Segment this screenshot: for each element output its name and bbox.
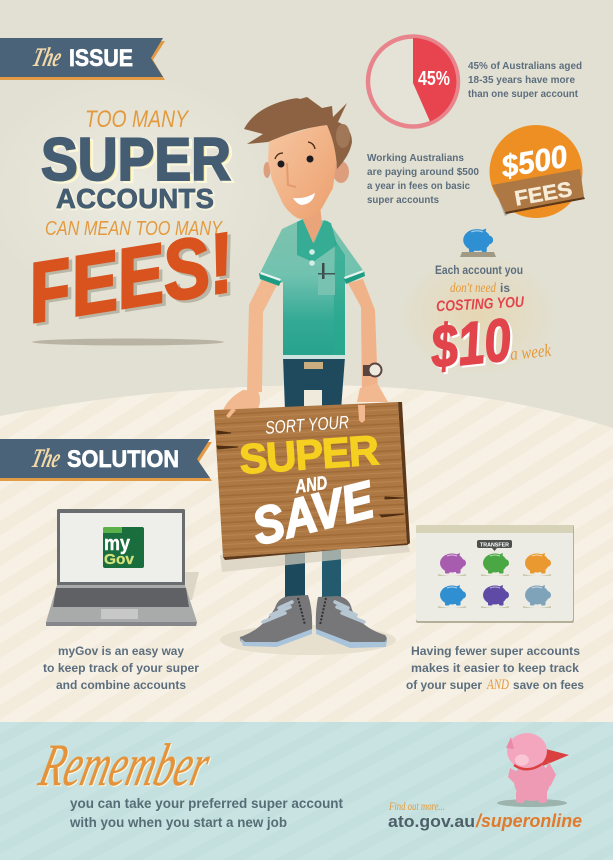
legs bbox=[283, 357, 345, 598]
shoes bbox=[240, 595, 387, 648]
badge: $500 fees bbox=[490, 125, 585, 218]
text: fewer super accounts: save on fees bbox=[513, 678, 584, 692]
text: find out more url: Find out more... bbox=[388, 799, 445, 813]
badge: $500 fees: FEES bbox=[513, 178, 574, 211]
text: fewer super accounts: makes it easier to keep track bbox=[411, 661, 579, 675]
headline: too many super accounts: TOO MANY bbox=[85, 106, 190, 133]
ribbon: the issue: The bbox=[30, 42, 65, 72]
icon: mygov logo: Gov bbox=[104, 551, 135, 568]
headline shadow bbox=[32, 338, 224, 346]
ribbon: the issue: ISSUE bbox=[69, 45, 133, 72]
icon: mygov logo: my bbox=[104, 533, 131, 555]
character: young man bbox=[220, 97, 410, 648]
text: each account costing you $10: $10 bbox=[427, 306, 514, 381]
text: find out more url: /superonline bbox=[475, 811, 582, 831]
text: fewer super accounts: Having fewer super accounts bbox=[411, 644, 580, 658]
hair bbox=[244, 97, 352, 169]
headline: too many super accounts: CAN MEAN TOO MANY bbox=[45, 218, 223, 240]
text: each account costing you $10 bbox=[427, 263, 553, 383]
belt bbox=[282, 355, 345, 369]
right arm bbox=[348, 279, 378, 392]
watch bbox=[363, 362, 382, 378]
icon: mygov logo bbox=[103, 527, 144, 568]
text: remember: Remember bbox=[34, 734, 217, 800]
headline: fees: FEES! bbox=[25, 218, 243, 343]
headline: fees: FEES! bbox=[21, 215, 239, 340]
wooden sign: sort your super and save: SORT YOUR bbox=[264, 412, 350, 438]
text: fewer super accounts: AND bbox=[486, 677, 509, 693]
text: mygov description: and combine accounts bbox=[56, 678, 186, 692]
text: 45% of Australians bbox=[468, 60, 582, 100]
tooltip: transfer: TRANSFER bbox=[480, 542, 509, 548]
text: take your account with you bbox=[69, 796, 343, 830]
ribbon: the solution: SOLUTION bbox=[67, 446, 179, 473]
text: take your account with you: with you when you start a new job bbox=[69, 815, 287, 830]
ribbon: the issue bbox=[0, 38, 165, 80]
text: take your account with you: you can take your preferred super account bbox=[70, 796, 343, 811]
text: find out more url: ato.gov.au bbox=[388, 812, 475, 831]
text: each account costing you $10: a week bbox=[509, 340, 553, 364]
icon: blue piggy bank bbox=[460, 228, 496, 257]
headline: too many super accounts: SUPER bbox=[41, 126, 231, 193]
text: mygov description: to keep track of your super bbox=[43, 661, 199, 675]
text: working australians: a year in fees on basic bbox=[367, 180, 470, 192]
text: remember bbox=[33, 733, 217, 800]
wooden sign: sort your super and save bbox=[214, 402, 410, 560]
headline: too many super accounts: ACCOUNTS bbox=[56, 183, 214, 214]
tooltip: transfer bbox=[477, 540, 512, 551]
text: each account costing you $10: COSTING YOU bbox=[436, 294, 525, 315]
icon: laptop with mygov bbox=[46, 509, 199, 626]
pie chart: 45% bbox=[368, 36, 458, 126]
glow behind costing text bbox=[398, 253, 558, 377]
text: mygov description bbox=[43, 644, 199, 692]
face bbox=[268, 123, 337, 219]
text: each account costing you $10: $10 bbox=[429, 308, 516, 383]
neck bbox=[303, 205, 322, 243]
wooden sign: sort your super and save: AND bbox=[293, 473, 329, 498]
panel: piggy bank account window bbox=[416, 525, 574, 623]
hands bbox=[222, 383, 388, 414]
text: 45% of Australians: 18-35 years have more bbox=[468, 74, 575, 86]
text: working australians: super accounts bbox=[367, 194, 439, 206]
badge: $500 fees: $500 bbox=[498, 139, 570, 185]
floor shadow bbox=[220, 625, 396, 655]
headline: too many super accounts: ACCOUNTS bbox=[57, 184, 215, 215]
text: working australians bbox=[367, 152, 479, 206]
text: 45% of Australians: 45% of Australians aged bbox=[468, 60, 582, 72]
facial features bbox=[275, 142, 315, 205]
text: each account costing you $10: is bbox=[500, 281, 510, 295]
ears bbox=[264, 161, 349, 183]
wooden sign: sort your super and save: SAVE bbox=[247, 471, 380, 557]
text: working australians: are paying around $500 bbox=[367, 166, 479, 178]
icon: superhero pig bbox=[497, 733, 569, 807]
text: each account costing you $10: don't need bbox=[450, 281, 497, 296]
finger over sign bbox=[226, 405, 365, 422]
text: remember: Remember bbox=[33, 733, 216, 799]
text: fewer super accounts: of your super bbox=[406, 678, 482, 692]
ribbon: the solution bbox=[0, 439, 212, 481]
left arm bbox=[247, 279, 277, 392]
pie chart: 45%: 45% bbox=[418, 68, 450, 90]
sign shadow bbox=[220, 545, 410, 572]
text: find out more url bbox=[388, 799, 582, 831]
text: 45% of Australians: than one super account bbox=[468, 88, 578, 100]
text: each account costing you $10: Each account you bbox=[435, 263, 523, 277]
text: mygov description: myGov is an easy way bbox=[58, 644, 184, 658]
piggy banks bbox=[438, 553, 551, 608]
text: working australians: Working Australians bbox=[367, 152, 464, 164]
ribbon: the solution: The bbox=[29, 443, 64, 473]
headline: too many super accounts: SUPER bbox=[44, 128, 234, 195]
headline: too many super accounts bbox=[41, 106, 234, 240]
text: fewer super accounts bbox=[406, 644, 584, 693]
wooden sign: sort your super and save: SUPER bbox=[238, 426, 381, 483]
shirt bbox=[259, 219, 365, 356]
